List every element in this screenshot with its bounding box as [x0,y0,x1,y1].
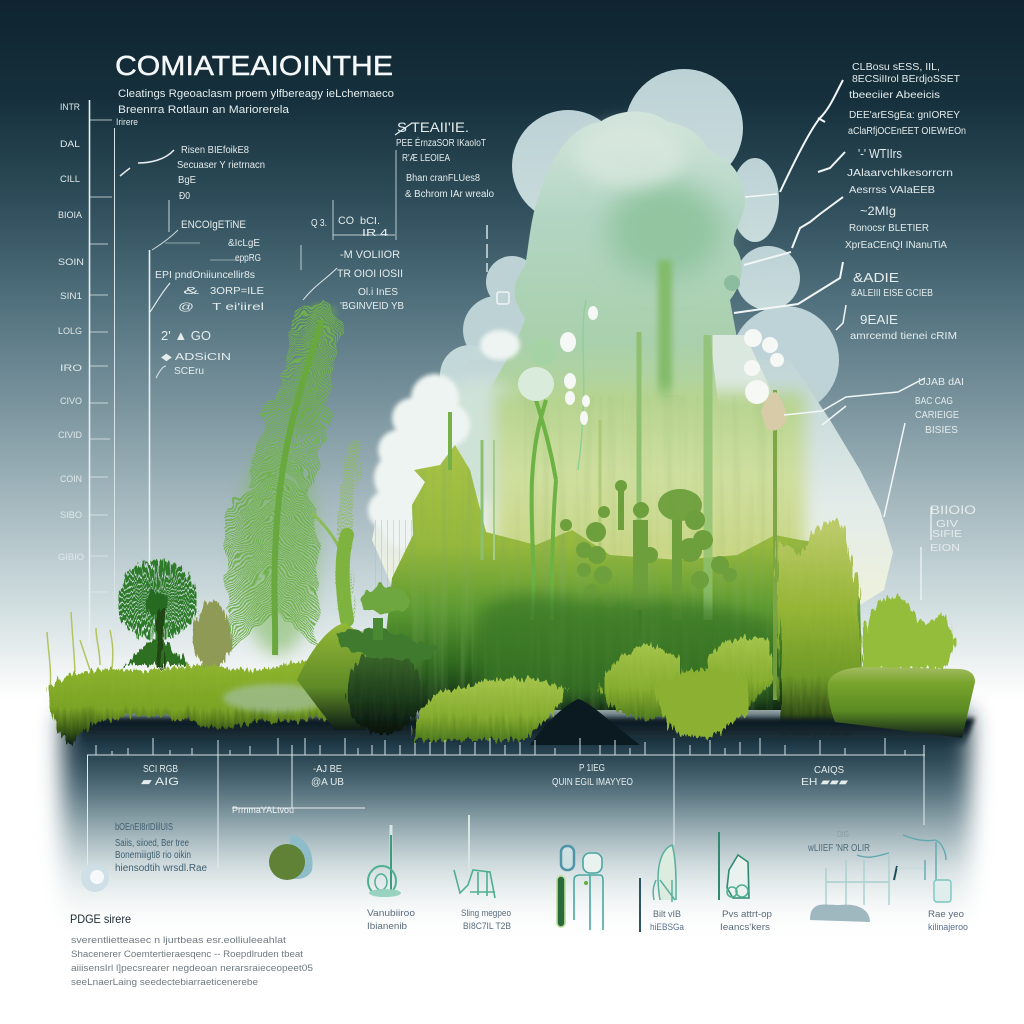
callout: center co: Ol.i InES [358,287,398,298]
callout: right group 3: XprEaCEnQI INanuTiA [845,240,947,251]
callout: right group 5 [836,305,957,342]
callout: upper left: Risen BIEfoikE8 [181,145,249,156]
scale labels: DAL [60,139,80,149]
label: section one: SCI RGB [143,764,178,775]
callout: right group 3: ~2MIg [860,204,896,218]
note text block: hiensodtih wrsdl.Rae [115,863,207,874]
cloud [372,69,893,605]
title: COMIATEAIOINTHE [115,50,393,81]
icon: plant pair [368,825,401,897]
callout: right group 7: BIIOIO [930,503,976,517]
callout: lower left: @ [178,302,194,313]
vegetation streak overlay [380,445,862,710]
label: section one [141,764,179,788]
misty patch [223,684,327,712]
callout: lower left: SCEru [174,366,204,377]
callout: lower left: 2' ▲ GO [161,328,211,343]
scale: ticks [90,120,112,592]
scale labels: CILL [60,174,80,184]
small vertical mark [486,225,488,272]
note text block: bOEnEI8rIDlilUIS [115,822,173,833]
note text block: Bonemiiigti8 rio oikin [115,850,191,861]
callout: right group 4: &ADIE [853,270,899,285]
scale labels: INTR [60,102,80,112]
foreground grass left [48,661,333,746]
callout: center co: IR 4 [362,228,389,239]
scale labels: BIOIA [58,210,82,220]
callout: upper left [120,145,265,202]
callout: right group 2 [818,146,953,196]
pale curtain [495,392,805,572]
callout: right group 2: '-' WTIIrs [858,146,902,161]
icon label: kilinajeroo [928,922,968,933]
bottom-left paragraph: Shacenerer Coemtertieraesqenc -- Roepdlruden tbeat [71,949,303,960]
callout: encolgetine [152,200,261,281]
callout: right group 6: BISIES [925,425,958,436]
callout: right group 2: Aesrrss VAIaEEB [849,185,935,196]
bottom section labels [141,763,848,788]
bottom-left paragraph: aiiisensIrl l]pecsrearer negdeoan nerarsraieceopeet05 [71,963,313,974]
fern: spine [274,320,322,655]
callout: top center: S TEAII'IE. [397,119,469,135]
callout: top center: Bhan cranFLUes8 [406,173,480,184]
bottom vertical connectors [88,745,924,868]
vertical stems [450,300,775,700]
spiky shrub [125,580,190,668]
icon label [928,909,968,933]
callout: top center: PEE ÉrnzaSOR IKaoIoT [396,136,486,149]
callout: lower left: T ei'iirel [212,302,264,313]
buds and leaf [518,306,787,430]
cloud: inner green mass [470,112,745,420]
bottom-left paragraph: sverentlietteasec n ljurtbeas esr.eolliuleeahlat [71,935,286,946]
cloud small badge [497,292,509,304]
small center-right label: wLIIEF 'NR OLIR [807,842,870,854]
small tree mound [338,586,437,734]
scale labels: IRO [60,363,82,373]
callout: lower left [150,283,264,378]
label: section four: CAIQS [814,765,844,776]
icon label: BI8C7IL T2B [463,921,511,932]
callout: right group 6 [784,377,964,517]
cloud: lighter top highlight [575,123,685,187]
callout: right group 7 [921,503,976,600]
callout: right group 2: JAlaarvchlkesorrcrn [847,168,953,179]
callout: right group 4 [734,262,933,313]
note text block [115,822,207,874]
callout: right group 1: CLBosu sESS, IIL, [852,62,940,73]
label: section two: -AJ BE [313,764,342,775]
callout: upper left: Ð0 [179,191,190,202]
subtitle: Breenrra Rotlaun an Mariorerela [118,104,290,116]
label: section two: @A UB [311,777,344,788]
callout: right group 5: amrcemd tienei cRIM [850,331,957,342]
small center-right label: DIG [837,830,849,839]
icon label: Ibianenib [367,921,407,932]
cloud: green column [658,260,672,410]
center-right mounds [601,637,773,738]
icon label [461,908,511,932]
cloud: soft green core [607,182,723,278]
callout: right group 1 [745,62,966,197]
icon: glass sphere [81,864,109,892]
callout: encolgetine: EPI pndOniiuncellir8s [155,270,255,281]
callout: top center: & Bchrom IAr wrealo [405,189,494,200]
callout: right group 5: 9EAIE [860,312,898,327]
scale labels: SIBO [60,510,82,520]
label: section three: P 1IEG [579,763,605,774]
scale labels: GIBIO [58,552,84,562]
cloud: pale side [710,335,790,430]
cloud: small round [724,275,740,291]
callout: lower left: 3ORP=ILE [210,286,264,297]
green vegetation silhouette [380,445,862,710]
fern: smaller plant [312,442,355,620]
callout: center co: TR OIOI IOSII [337,268,403,280]
callout: right group 4: &ALEIII EISE GCIEB [851,288,933,299]
note text block: Saiis, siioed, Ber tree [115,838,189,849]
left scale [90,100,150,650]
thin yellow grass left of curtain [375,520,440,590]
label: section four: EH ▰▰▰ [801,777,848,788]
subtitle [116,88,394,127]
callout: center co [301,150,404,312]
label: section two [311,764,344,788]
curtain streaks [510,395,790,555]
white puffs left [368,330,530,549]
scale labels: COIN [60,474,82,484]
callout: right group 1: 8ECSiIIrol BErdjoSSET [852,74,960,85]
icon label: Vanubiiroo [367,908,415,919]
bottom-left paragraph [71,935,313,988]
callout: center co: 'BGINVEID YB [340,301,404,312]
wavy label: PrmmaYALtvou [232,805,294,815]
callout: center co: Q 3. [311,218,327,229]
center rock [530,699,640,745]
cloud: outer lobes [440,69,839,414]
small center-right label [807,830,870,854]
bottom comb axis [87,738,925,755]
callout: right group 7: EION [930,543,960,554]
fern: translucent body [238,445,318,655]
callout: lower left: & [183,286,200,297]
scale: axis lines [90,100,150,650]
callout: top center: R'Æ LEOIEA [402,153,450,164]
callout: encolgetine: eppRG [235,253,261,264]
callout: right group 6: UJAB dAI [918,377,964,388]
label: section one: ▰ AIG [141,776,179,788]
callout: lower left: ◆ ADSiCIN [161,352,231,363]
icon: green sphere [269,835,313,880]
callout: encolgetine: ENCOIgETiNE [181,219,246,231]
right bush [862,597,955,670]
callout: upper left: Secuaser Y rietrnacn [177,160,265,171]
right tall grass [778,520,862,735]
callout: right group 1: tbeeciier Abeeicis [849,90,940,101]
scale labels: SOIN [58,257,84,267]
cloud: lower body [372,360,893,605]
callout: right group 6: CARIEIGE [915,410,959,421]
callout: right group 6: BAC CAG [915,396,953,407]
floor gradient panel [62,712,970,934]
icon label: Sling megpeo [461,908,511,919]
fern: upper translucent plume [300,305,325,430]
subtitle: Cleatings Rgeoaclasm proem ylfbereagy ieLchemaeco [118,88,394,100]
callout: right group 3 [744,197,947,265]
green slope under mound [297,623,370,730]
thin grass blades left [47,612,113,690]
callout: center co: CO [338,215,354,227]
icon: root forms [454,815,495,898]
callout: right group 1: aClaRfjOCEnEET OIEWrEOn [848,126,966,137]
icon label: Pvs attrt-op [722,909,772,920]
scale labels: LOLG [58,326,82,336]
icon label: hiEBSGa [650,922,685,933]
brown shrub [193,601,231,669]
center grass mound [413,679,568,740]
scale labels: CIVO [60,396,82,406]
fern: tall feathery plant [238,305,336,655]
callout: top center [395,119,494,200]
scale labels: SIN1 [60,291,82,301]
label: section three [552,763,633,788]
icon: lab apparatus [810,835,951,922]
grass platform right [828,667,975,738]
callout: right group 3: Ronocsr BLETIER [849,223,929,234]
callout: right group 7: GIV [936,519,958,530]
callout: center co: bCI. [360,216,380,227]
callout: center co: -M VOLIIOR [340,249,400,261]
ground shadow [78,718,975,745]
scale labels [58,102,84,562]
callout: right group 1: DEE'arESgEa: gnIOREY [849,110,960,121]
callout: right group 7: SIFIE [932,529,962,540]
background sky gradient [0,0,1024,700]
scale labels: CIVID [58,430,82,440]
label: section four [801,765,848,788]
subtitle: Irirere [116,117,138,127]
icon: house sprout [719,832,749,900]
icon label: Rae yeo [928,909,964,920]
icon: tall specimen [640,845,676,932]
callout: encolgetine: &IcLgE [228,238,260,249]
fern: feathers [250,307,336,635]
bottom-left paragraph: seeLnaerLaing seedectebiarraeticenerebe [71,977,258,988]
round leaf clusters [560,480,737,620]
icon label [367,908,415,932]
bottom-left heading: PDGE sirere [70,912,131,926]
dark undergrowth [480,596,770,700]
icon label [720,909,772,933]
callout: upper left: BgE [178,175,196,186]
icon label: Bilt vIB [653,909,681,920]
label: section three: QUIN EGIL IMAYYEO [552,777,633,788]
icon: capsules [557,846,603,930]
icon label: Ieancs'kers [720,922,770,933]
icon label [650,909,685,933]
